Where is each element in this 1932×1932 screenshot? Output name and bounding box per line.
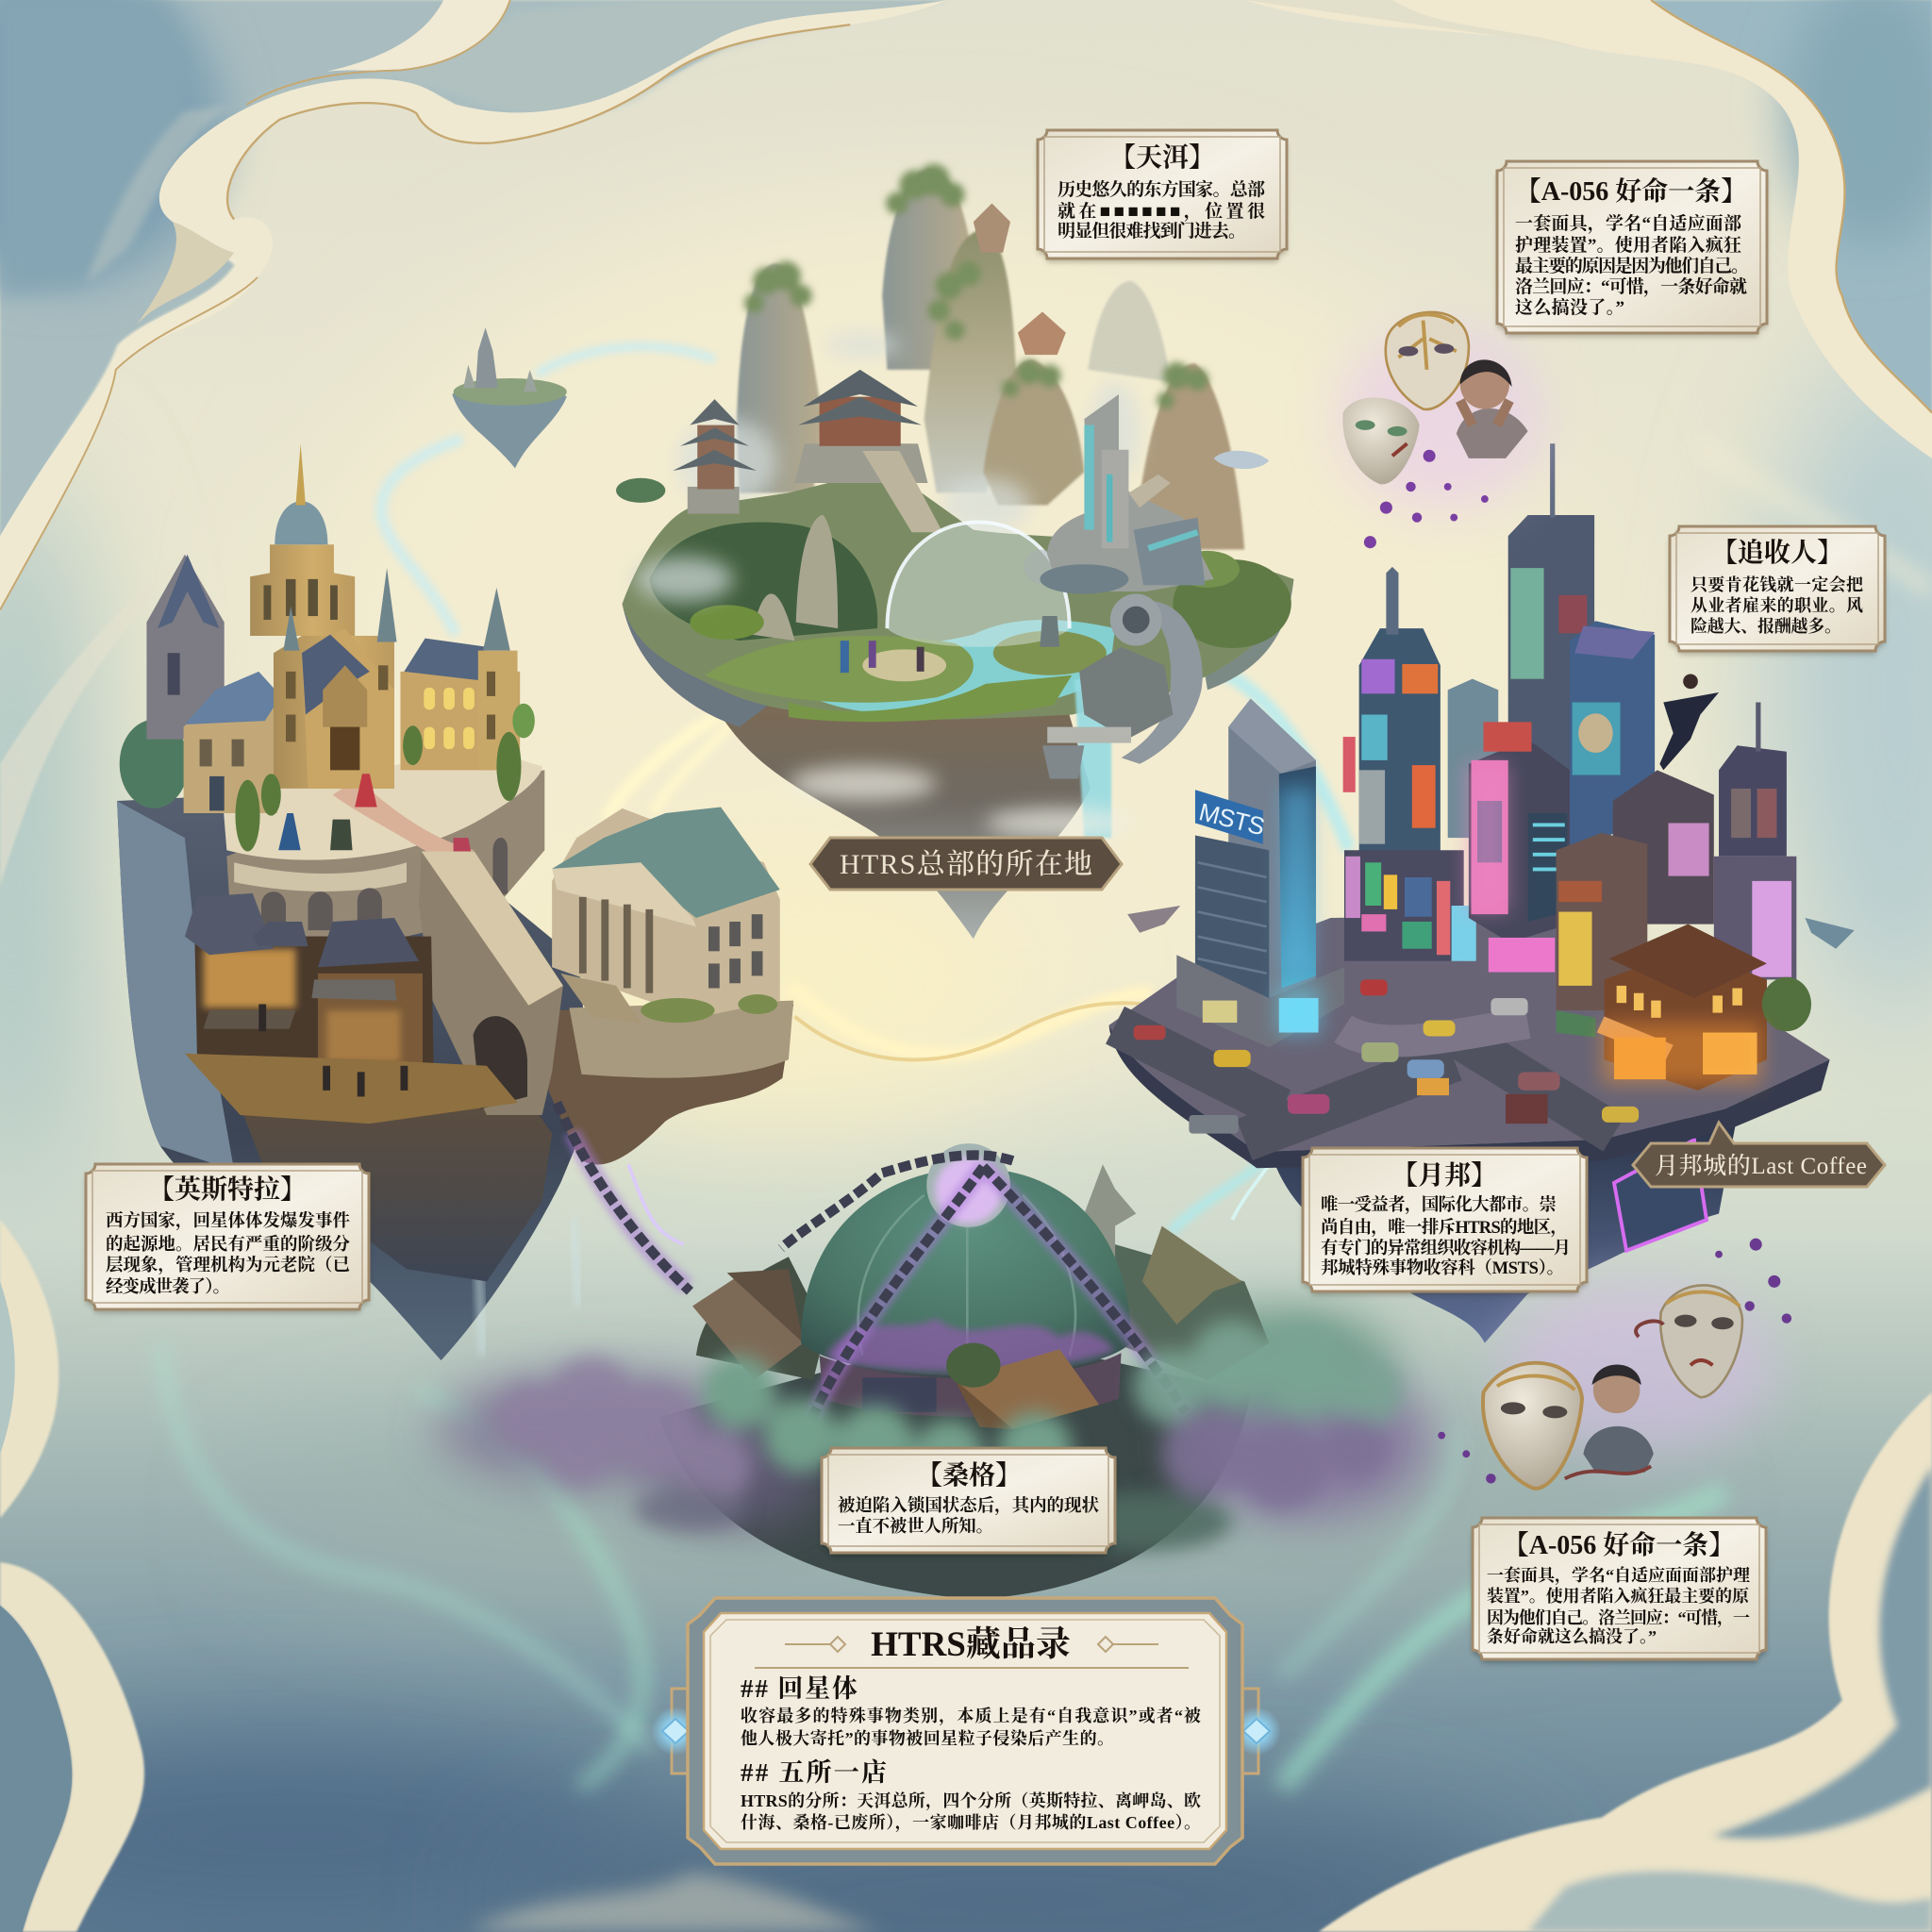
lower-left cloud scrolls — [0, 1220, 58, 1518]
heading: 【A-056 好命一条】 — [1515, 176, 1747, 207]
panel: 天洱 — [1038, 130, 1287, 262]
water pools — [764, 620, 1115, 716]
coffee shop — [1557, 924, 1767, 1091]
main temple — [794, 370, 942, 532]
heading: 【桑格】 — [916, 1460, 1022, 1491]
body: 的起源地。居民有严重的阶级分 — [106, 1234, 350, 1255]
ribbon: HTRS总部的所在地 — [810, 838, 1122, 890]
section: 回星体: 他人极大寄托”的事物被回星粒子侵染后产生的。 — [741, 1728, 1114, 1748]
left pagoda — [673, 399, 757, 514]
section: 五所一店: 什海、桑格-已废所），一家咖啡店（月邦城的Last Coffee）。 — [741, 1812, 1201, 1833]
left roofs — [692, 1275, 804, 1380]
body: 历史悠久的东方国家。总部 — [1058, 178, 1265, 200]
hover craft — [1214, 451, 1269, 469]
ribbon swirl left — [0, 0, 949, 610]
front poison cloud puffs — [495, 1320, 1402, 1551]
outer frame — [688, 1598, 1242, 1864]
sign-covered low block — [1344, 850, 1476, 961]
trees left — [120, 720, 189, 808]
cone trees — [235, 725, 521, 852]
body: 有专门的异常组织收容机构——月 — [1321, 1238, 1571, 1258]
body: 唯一受益者，国际化大都市。崇 — [1321, 1194, 1557, 1215]
panel: 桑格 — [822, 1448, 1115, 1557]
figures on terrace — [355, 774, 377, 808]
heading: 【追收人】 — [1711, 538, 1843, 568]
grey tower — [146, 555, 225, 740]
parchment — [704, 1613, 1226, 1849]
ribbon: 月邦城的Last Coffee — [1633, 1123, 1885, 1187]
top-left blue corner — [0, 0, 949, 542]
body: 尚自由，唯一排斥HTRS的地区， — [1321, 1217, 1568, 1238]
body — [106, 1210, 350, 1297]
masks: top group — [1337, 312, 1546, 548]
mist banks — [677, 333, 1140, 532]
mist over island base — [789, 766, 1134, 838]
dome & drum — [250, 544, 355, 636]
section: 五所一店: ## 五所一店 — [741, 1758, 887, 1787]
violet shards — [1364, 450, 1489, 548]
rear mounds and pagoda — [696, 1257, 825, 1380]
underside — [1269, 1115, 1738, 1343]
body: 被迫陷入锁国状态后，其内的现状 — [838, 1495, 1099, 1516]
island: 桑格 dome — [438, 1103, 1429, 1599]
panel: 追收人 — [1670, 526, 1885, 655]
body: 从业者雇来的职业。风 — [1690, 595, 1863, 615]
body — [838, 1495, 1099, 1537]
lightning — [628, 1164, 684, 1244]
island: 月邦 city — [1109, 443, 1855, 1343]
right wing — [400, 672, 520, 770]
distant peaks — [737, 169, 1244, 550]
body: 明显但很难找到门进去。 — [1058, 221, 1246, 242]
pale mask — [1342, 397, 1420, 484]
tree — [1762, 977, 1811, 1031]
ribbon swirl top — [326, 0, 510, 72]
distressed person — [1565, 1321, 1663, 1478]
heading: 【天洱】 — [1109, 142, 1215, 173]
island: 英斯特拉 — [117, 443, 793, 1360]
cliff underside — [117, 789, 591, 1360]
neon tower — [1343, 567, 1441, 857]
rock base — [705, 685, 1091, 939]
main facade — [274, 636, 394, 789]
panel: A-056 好命一条 (upper) — [1497, 161, 1767, 337]
tech complex — [1040, 394, 1214, 594]
body: 险越大、报酬越多。 — [1690, 616, 1841, 636]
body: 层现象，管理机构为元老院（已 — [106, 1255, 350, 1275]
section: 五所一店: HTRS的分所：天洱总所，四个分所（英斯特拉、离岬岛、欧 — [741, 1790, 1201, 1811]
masks: bottom group — [1438, 1239, 1791, 1489]
chained dome — [801, 1168, 1131, 1375]
glass dome — [887, 522, 1070, 647]
vehicles — [1134, 979, 1639, 1134]
body: 一直不被世人所知。 — [838, 1516, 993, 1537]
mist on terrain — [635, 557, 733, 601]
panel: HTRS藏品录 main card — [651, 1598, 1281, 1864]
body — [1487, 1565, 1750, 1646]
roads — [1115, 1025, 1614, 1140]
terrace walls — [226, 770, 544, 937]
panel: 月邦 — [1303, 1148, 1587, 1295]
far pagoda on crag — [974, 204, 1066, 355]
leaping figure — [1659, 674, 1719, 770]
rock shelf under the temple — [548, 1004, 793, 1165]
silver mask — [1660, 1285, 1742, 1397]
chains — [557, 1103, 1185, 1421]
flying cars — [1127, 906, 1855, 949]
city platform — [1109, 914, 1830, 1152]
side ornaments — [651, 1689, 1281, 1774]
green terrain — [623, 468, 1293, 720]
body: 因为他们自己。洛兰回应：“可惜，一 — [1487, 1607, 1750, 1628]
MSTS tower — [1176, 699, 1344, 1047]
staircase — [419, 852, 563, 1115]
body: 只要肯花钱就一定会把 — [1690, 575, 1863, 594]
crying person — [1457, 359, 1528, 458]
body: 最主要的原因是因为他们自己。 — [1515, 256, 1749, 276]
rear towers — [1448, 443, 1655, 850]
terrace top — [222, 752, 542, 860]
title: HTRS藏品录 — [871, 1624, 1071, 1664]
body: 条好命就这么搞没了。” — [1487, 1626, 1657, 1646]
ribbon: HTRS总部的所在地: HTRS总部的所在地 — [840, 849, 1092, 880]
front roof — [955, 1349, 1099, 1429]
body: 一套面具，学名“自适应面面部护理 — [1487, 1565, 1750, 1586]
island: 天洱 — [616, 164, 1293, 939]
section: 回星体: ## 回星体 — [741, 1674, 858, 1703]
outer poison cloud — [438, 1309, 1429, 1528]
panel: A-056 好命一条 (lower) — [1473, 1518, 1766, 1663]
left wing — [184, 690, 277, 813]
lower rock band — [241, 1084, 552, 1281]
body: 邦城特殊事物收容科（MSTS）。 — [1321, 1257, 1564, 1278]
section: 五所一店 — [741, 1758, 1201, 1833]
heading: 【月邦】 — [1391, 1160, 1497, 1191]
body: 一套面具，学名“自适应面部 — [1515, 212, 1741, 234]
gold-trim mask — [1483, 1363, 1582, 1489]
bottom-right cloud scrolls — [1319, 1392, 1932, 1932]
mechanical arm — [1042, 594, 1203, 778]
body: 经变成世袭了）。 — [106, 1276, 230, 1297]
peak foliage — [744, 164, 1208, 409]
ribbon: 月邦城的Last Coffee: 月邦城的Last Coffee — [1655, 1153, 1867, 1179]
slum quarter — [185, 893, 518, 1124]
cathedral — [146, 443, 520, 813]
title flourishes — [755, 1637, 1189, 1668]
body: 护理装置”。使用者陷入疯狂 — [1515, 234, 1741, 256]
top-right blue corner — [1651, 0, 1932, 419]
ribbon swirl right — [1244, 0, 1932, 458]
right roof — [1142, 1226, 1242, 1324]
MSTS sign: MSTS — [1196, 797, 1268, 841]
energy trails connecting the islands — [381, 346, 1349, 1232]
body: 洛兰回应：“可惜，一条好命就 — [1515, 276, 1747, 297]
dark right buildings — [1557, 702, 1796, 1010]
small floating island — [452, 327, 567, 468]
body: 就在■■■■■■，位置很 — [1058, 201, 1265, 222]
heading: 【英斯特拉】 — [148, 1174, 307, 1205]
pink billboard tower — [1469, 722, 1570, 973]
section: 回星体: 收容最多的特殊事物类别，本质上是有“自我意识”或者“被 — [741, 1706, 1201, 1726]
body: 西方国家，回星体体发爆发事件 — [106, 1210, 350, 1231]
heading: 【A-056 好命一条】 — [1503, 1530, 1735, 1560]
rock base — [659, 1331, 1251, 1599]
body: 装置”。使用者陷入疯狂最主要的原 — [1487, 1587, 1750, 1606]
neon sign glow — [1276, 764, 1762, 1084]
gold mask — [1386, 312, 1469, 409]
body — [1690, 575, 1863, 636]
section: 回星体 — [741, 1674, 1201, 1748]
body: 这么搞没了。” — [1515, 296, 1624, 318]
body — [1321, 1194, 1571, 1278]
panel: 英斯特拉 — [86, 1164, 369, 1313]
violet shards — [1438, 1239, 1791, 1484]
body — [1515, 212, 1749, 318]
body — [1058, 178, 1265, 242]
neoclassical temple — [552, 808, 780, 1023]
